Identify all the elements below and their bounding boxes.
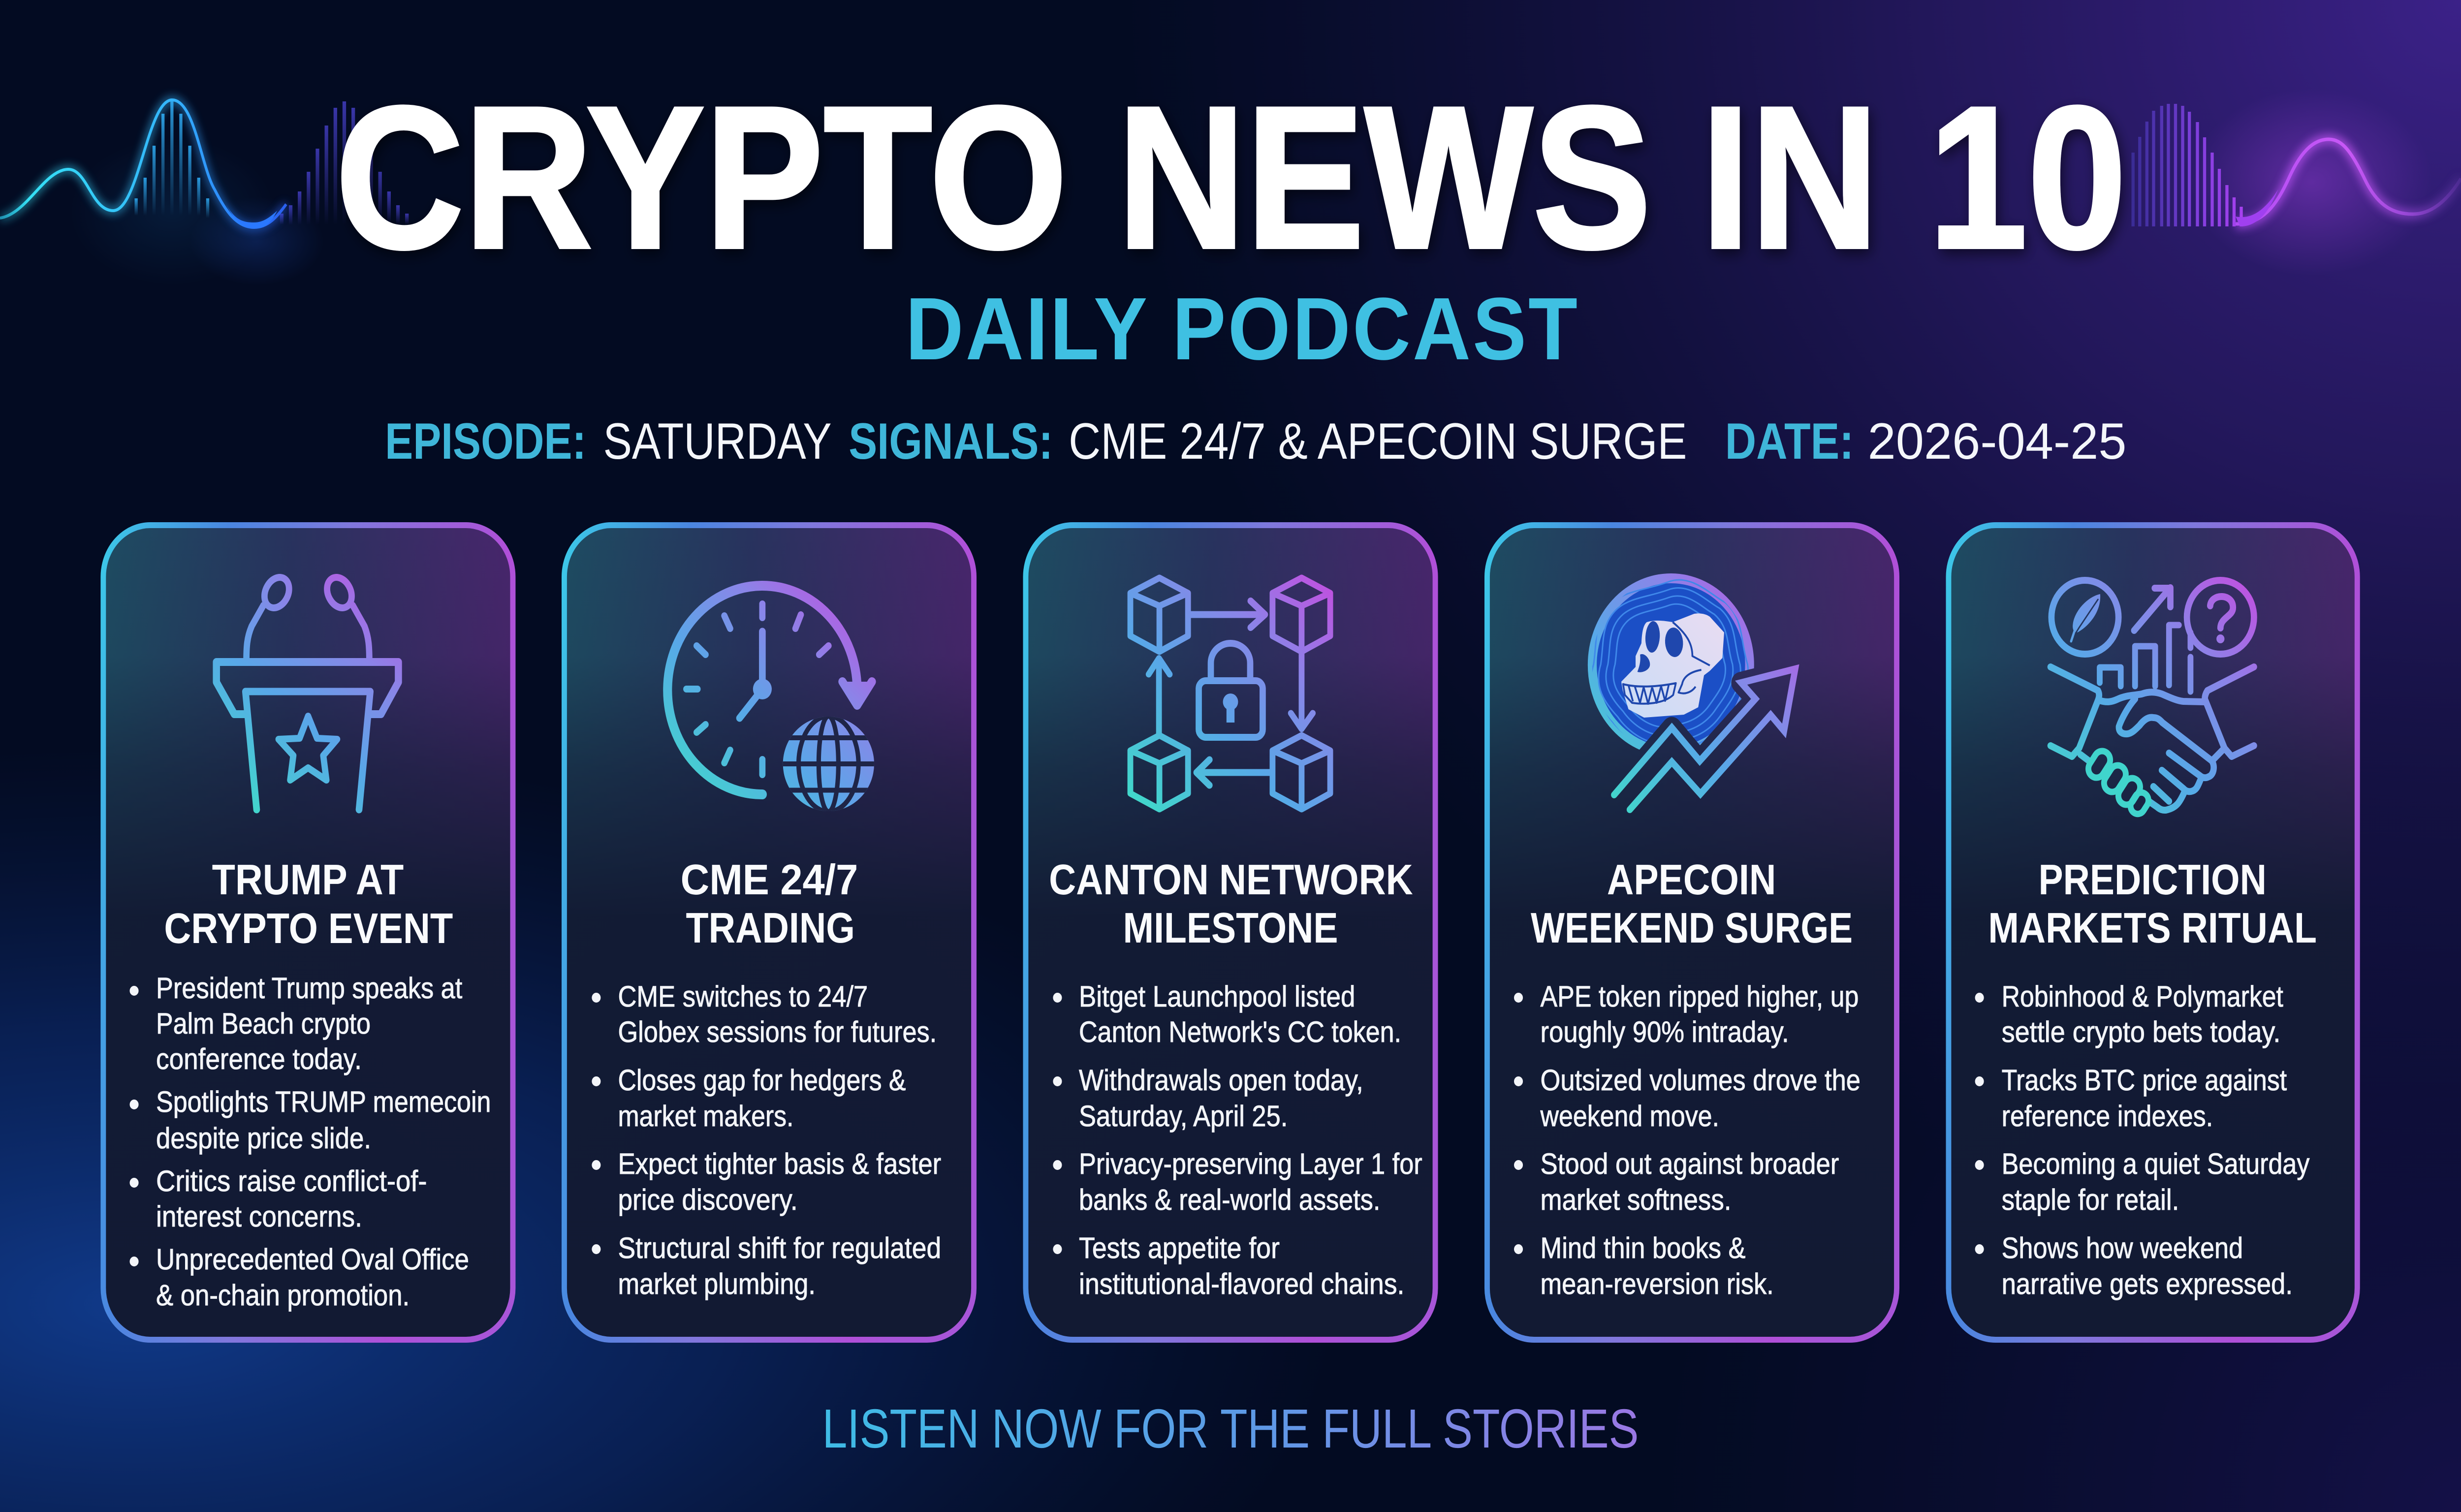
bullet list: banks & real-world assets. xyxy=(1079,1183,1380,1216)
episode line: SIGNALS: xyxy=(849,413,1053,470)
bullet list: conference today. xyxy=(156,1042,362,1075)
bullet list: despite price slide. xyxy=(156,1122,371,1155)
bullet list: weekend move. xyxy=(1540,1100,1719,1133)
heading: CME 24/7 xyxy=(681,856,858,904)
heading: MARKETS RITUAL xyxy=(1988,904,2317,952)
bullet list: Tracks BTC price against xyxy=(2002,1064,2287,1097)
bullet list: Becoming a quiet Saturday xyxy=(2002,1147,2309,1180)
bullet list: Unprecedented Oval Office xyxy=(156,1243,469,1276)
icon: clock with arrow and globe xyxy=(667,586,881,812)
bullet list: reference indexes. xyxy=(2002,1100,2213,1133)
heading xyxy=(681,856,858,952)
audio waveform: right xyxy=(2131,89,2461,276)
title: CRYPTO NEWS IN 10 xyxy=(335,64,2126,291)
card frame xyxy=(1949,525,2357,1340)
episode line xyxy=(385,413,2126,470)
heading xyxy=(1988,856,2317,952)
heading: WEEKEND SURGE xyxy=(1531,904,1853,952)
subtitle: DAILY PODCAST xyxy=(906,280,1578,378)
bullet list: President Trump speaks at xyxy=(156,972,463,1005)
bullet list: price discovery. xyxy=(618,1183,798,1216)
bullet list: Saturday, April 25. xyxy=(1079,1100,1288,1133)
heading: CRYPTO EVENT xyxy=(164,905,453,952)
bullet list: narrative gets expressed. xyxy=(2002,1267,2293,1300)
heading xyxy=(164,856,453,952)
bullet list: Palm Beach crypto xyxy=(156,1007,371,1040)
card frame xyxy=(103,525,513,1340)
card frame xyxy=(1487,525,1897,1340)
bullet list xyxy=(1975,980,2309,1300)
bullet list: Closes gap for hedgers & xyxy=(618,1064,906,1097)
icon: ape skull coin with rising arrow xyxy=(1591,578,1795,810)
panel: prediction markets ritual xyxy=(1949,525,2357,1340)
bullet list: Shows how weekend xyxy=(2002,1231,2243,1264)
card frame xyxy=(564,525,974,1340)
card frame xyxy=(1026,525,1435,1340)
bullet list: market plumbing. xyxy=(618,1267,816,1300)
bullet list: APE token ripped higher, up xyxy=(1541,980,1859,1013)
bullet list: Spotlights TRUMP memecoin xyxy=(156,1085,491,1118)
bullet list xyxy=(592,980,941,1300)
icon: blockchain cubes around padlock xyxy=(1131,578,1330,809)
bullet list: Mind thin books & xyxy=(1541,1231,1746,1264)
call to action: LISTEN NOW FOR THE FULL STORIES xyxy=(822,1398,1639,1459)
panel: Trump at crypto event xyxy=(103,525,513,1340)
bullet list: market makers. xyxy=(618,1100,793,1133)
bullet list: market softness. xyxy=(1541,1183,1731,1216)
bullet list: settle crypto bets today. xyxy=(2002,1015,2280,1048)
heading: APECOIN xyxy=(1607,856,1776,904)
panel: CME 24/7 trading xyxy=(564,525,974,1340)
bullet list xyxy=(1053,980,1422,1300)
bullet list: roughly 90% intraday. xyxy=(1541,1015,1789,1048)
bullet list: Critics raise conflict-of- xyxy=(156,1165,427,1197)
episode line: SATURDAY xyxy=(603,413,832,470)
bullet list: institutional-flavored chains. xyxy=(1079,1267,1404,1300)
bullet list: staple for retail. xyxy=(2002,1183,2179,1216)
bullet list: interest concerns. xyxy=(156,1200,362,1233)
bullet list: Structural shift for regulated xyxy=(618,1231,941,1264)
icon: handshake, feather, question mark and bars xyxy=(2051,580,2254,817)
bullet list: Outsized volumes drove the xyxy=(1541,1064,1861,1097)
heading: CANTON NETWORK xyxy=(1049,856,1413,904)
audio waveform: left xyxy=(0,100,409,285)
bullet list: Robinhood & Polymarket xyxy=(2002,980,2283,1013)
heading: TRUMP AT xyxy=(212,856,404,904)
bullet list: Stood out against broader xyxy=(1541,1147,1839,1180)
episode line: 2026-04-25 xyxy=(1868,413,2126,470)
bullet list xyxy=(130,972,491,1312)
icon: podium with microphones and star xyxy=(217,572,398,810)
heading xyxy=(1531,856,1853,952)
heading: TRADING xyxy=(686,904,855,952)
bullet list: CME switches to 24/7 xyxy=(618,980,868,1013)
bullet list: Expect tighter basis & faster xyxy=(618,1147,941,1180)
heading: PREDICTION xyxy=(2039,856,2267,904)
panel: ApeCoin weekend surge xyxy=(1487,525,1897,1340)
panel: Canton Network milestone xyxy=(1026,525,1435,1340)
heading: MILESTONE xyxy=(1123,904,1338,952)
bullet list: Globex sessions for futures. xyxy=(618,1015,937,1048)
episode line: DATE: xyxy=(1725,413,1854,470)
bullet list xyxy=(1514,980,1861,1300)
heading xyxy=(1049,856,1413,952)
episode line: EPISODE: xyxy=(385,413,586,470)
bullet list: Privacy-preserving Layer 1 for xyxy=(1079,1147,1422,1180)
episode line: CME 24/7 & APECOIN SURGE xyxy=(1069,413,1687,470)
bullet list: mean-reversion risk. xyxy=(1541,1267,1774,1300)
bullet list: Bitget Launchpool listed xyxy=(1079,980,1355,1013)
bullet list: & on-chain promotion. xyxy=(156,1279,410,1312)
bullet list: Withdrawals open today, xyxy=(1079,1064,1363,1097)
bullet list: Canton Network's CC token. xyxy=(1079,1015,1401,1048)
bullet list: Tests appetite for xyxy=(1079,1231,1280,1264)
